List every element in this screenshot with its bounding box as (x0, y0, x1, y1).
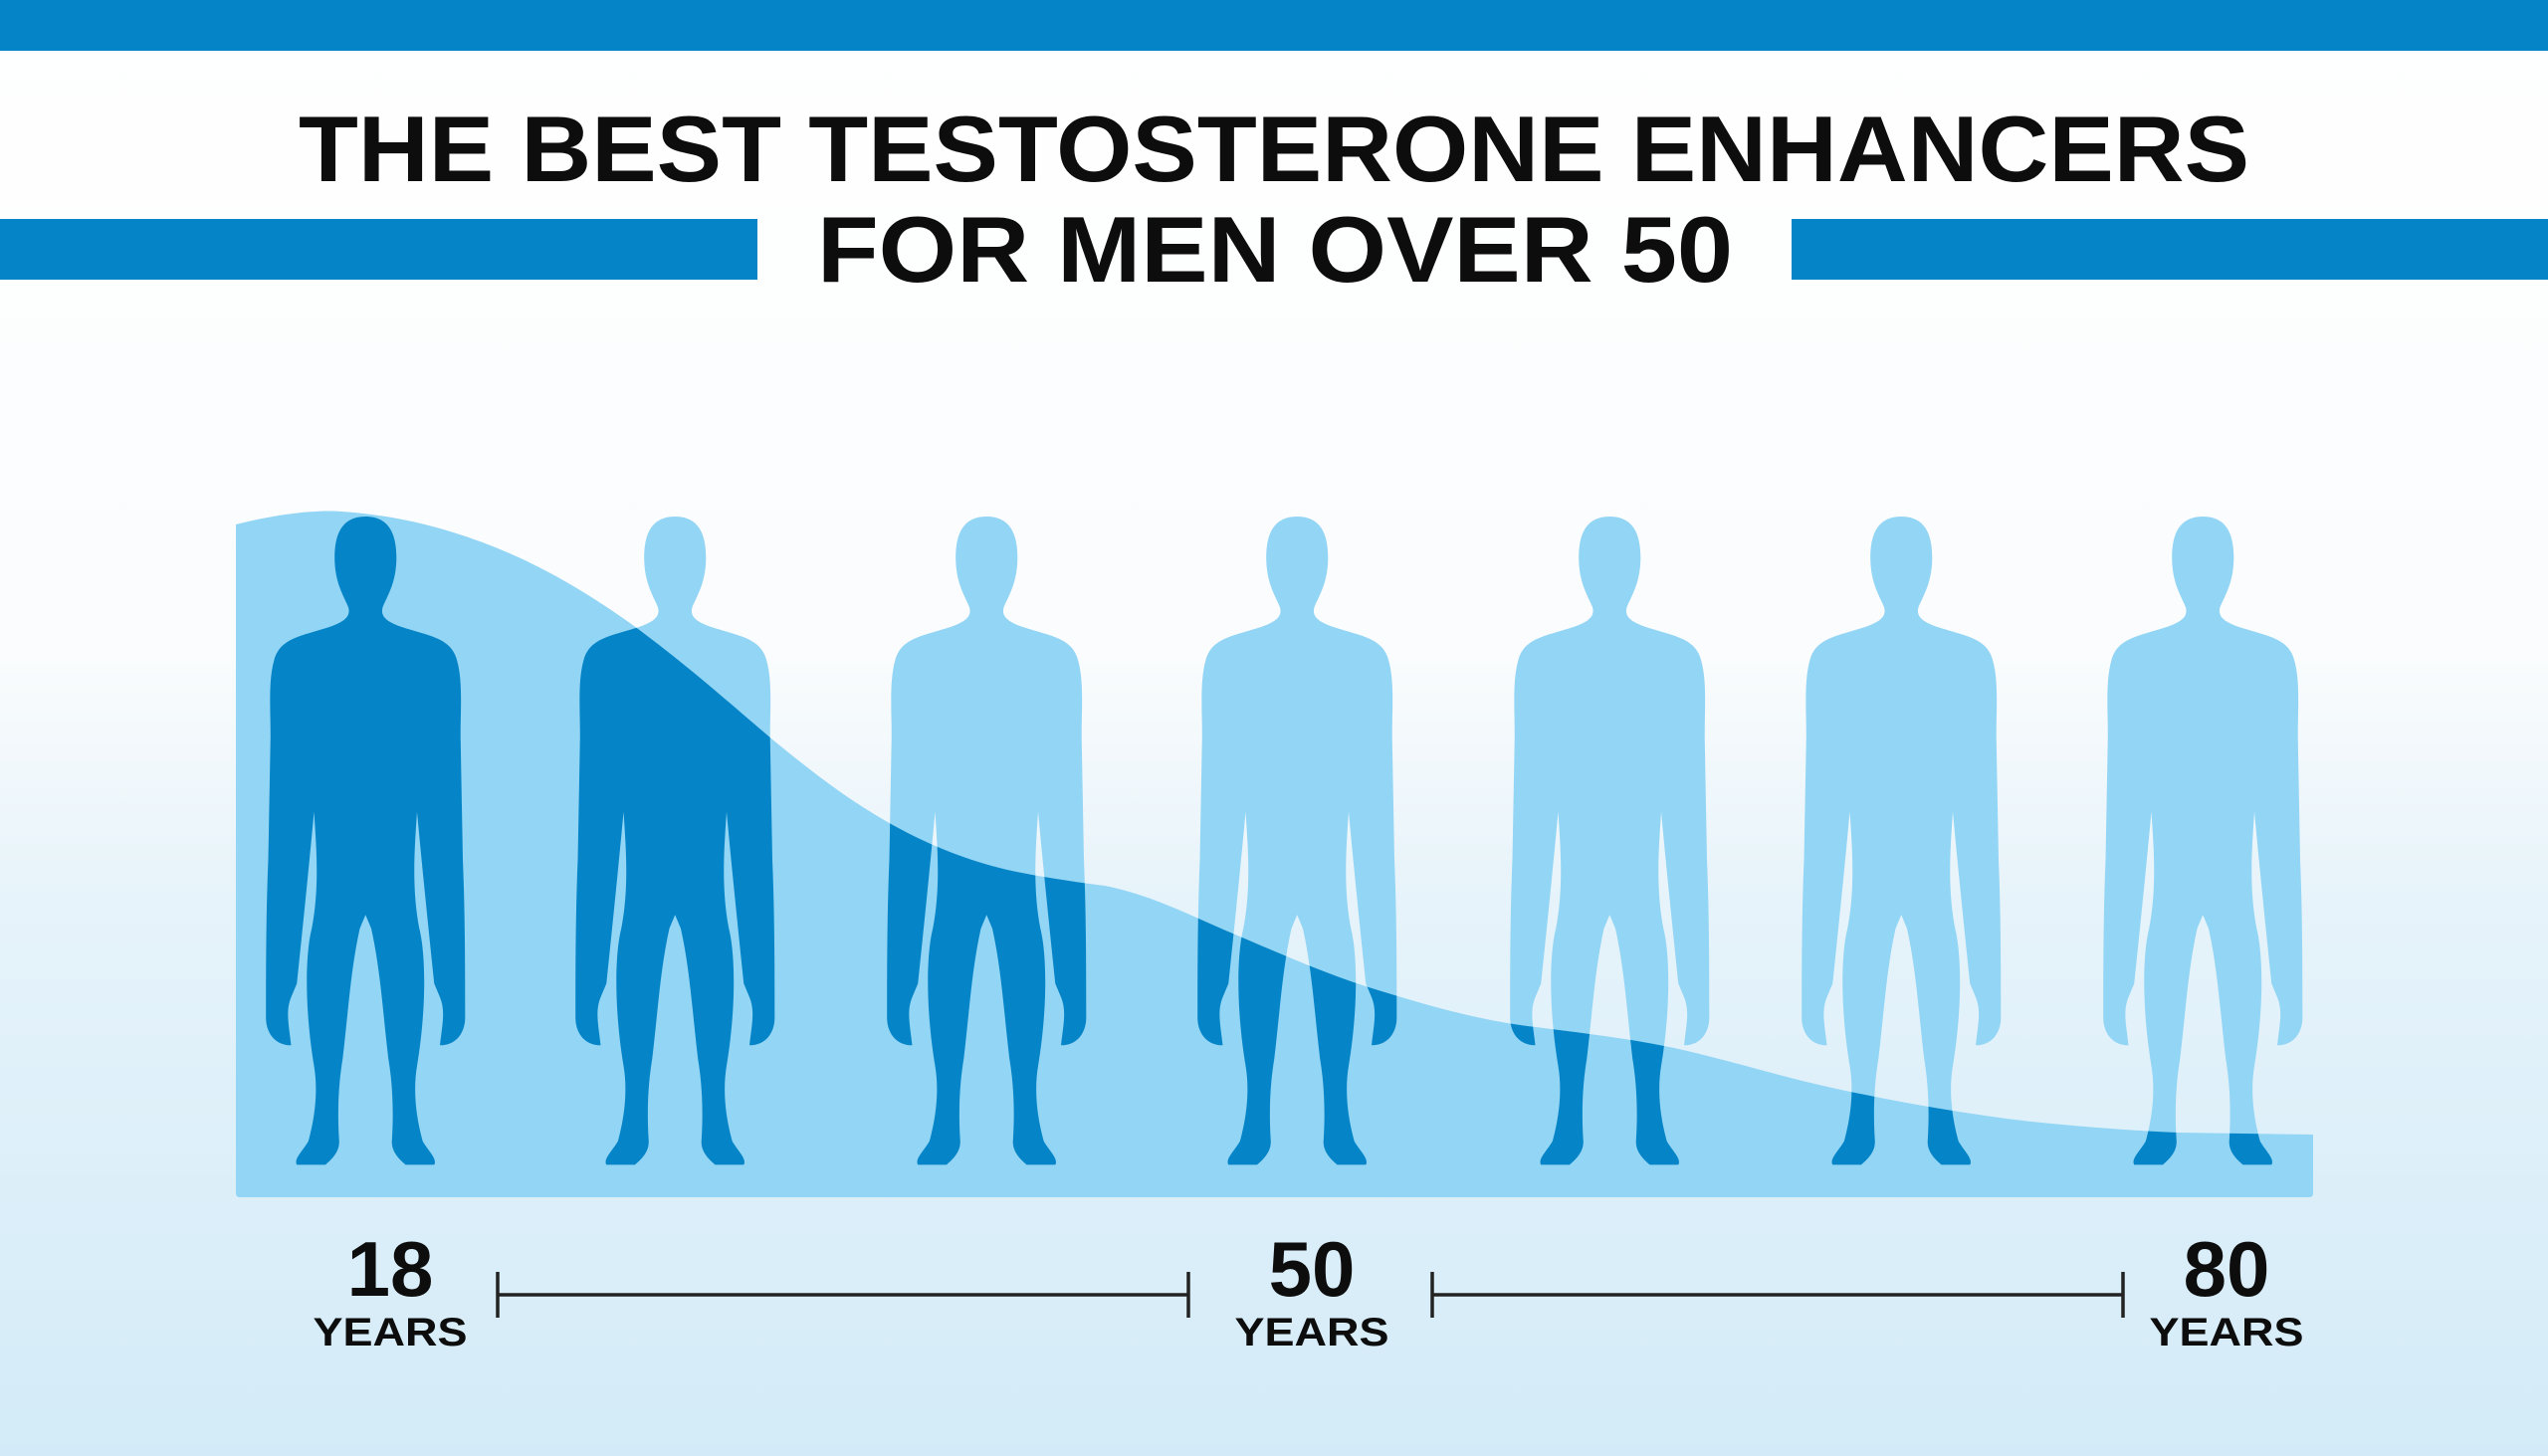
age labels: 80 (2184, 1225, 2269, 1313)
age labels: YEARS (313, 1311, 468, 1354)
age labels: 50 (1269, 1225, 1355, 1313)
age labels (313, 1225, 2303, 1354)
chart: testosterone decline area (236, 512, 2313, 1197)
top bar (0, 0, 2548, 51)
figures dark (within area) (266, 517, 2302, 1164)
right bar (1792, 219, 2548, 280)
age labels: YEARS (2150, 1311, 2303, 1354)
title (299, 97, 2249, 302)
title: THE BEST TESTOSTERONE ENHANCERS (299, 97, 2249, 201)
axis: age timeline (498, 1272, 2123, 1318)
left bar (0, 219, 757, 280)
age labels: 18 (347, 1225, 433, 1313)
figures light (266, 517, 2302, 1164)
title: FOR MEN OVER 50 (817, 197, 1733, 302)
age labels: YEARS (1234, 1311, 1389, 1354)
